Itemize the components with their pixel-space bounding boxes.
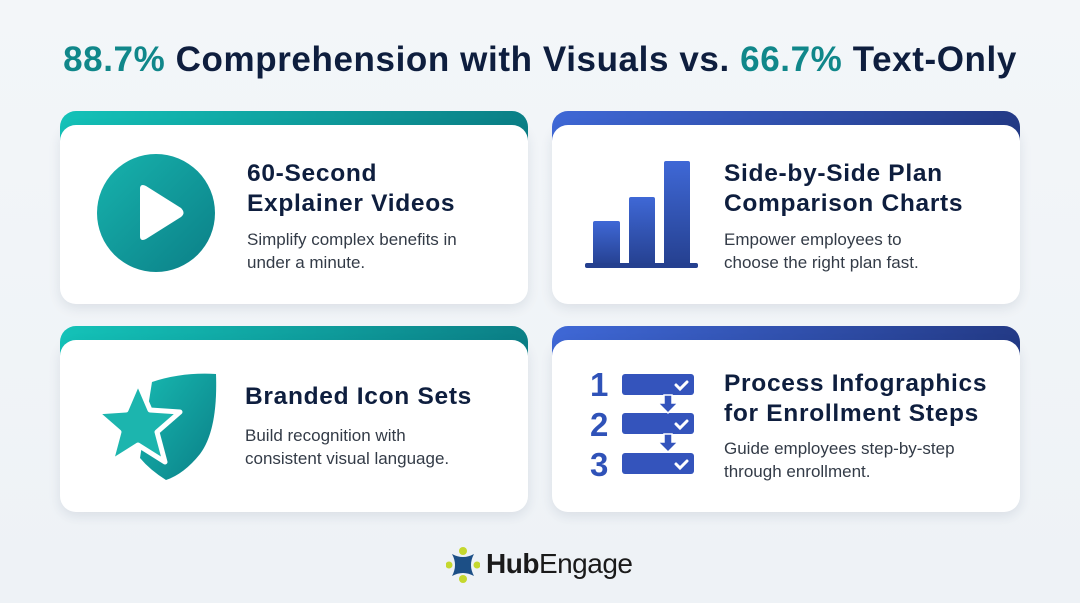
- panel: comparison charts: [550, 111, 1022, 310]
- heading: [724, 370, 987, 427]
- text: Simplify complex benefits in: [247, 230, 457, 249]
- text: Build recognition with: [245, 426, 406, 445]
- heading: Side-by-Side Plan: [724, 160, 943, 187]
- icon: numbered steps: 2: [590, 406, 608, 443]
- text: Empower employees to: [724, 230, 902, 249]
- icon: bar chart: [585, 161, 698, 268]
- icon: numbered steps: [590, 370, 694, 483]
- text: choose the right plan fast.: [724, 253, 919, 272]
- logo: HubEngage: [446, 547, 632, 583]
- text: Guide employees step-by-step: [724, 439, 955, 458]
- heading: [724, 160, 963, 217]
- text: consistent visual language.: [245, 449, 449, 468]
- heading: 60-Second: [247, 160, 377, 187]
- text: [245, 426, 449, 468]
- panel: process infographics: [550, 326, 1022, 518]
- panel: icon sets: [58, 326, 530, 518]
- icon: logo mark: [446, 547, 480, 583]
- panel: explainer videos: [58, 111, 530, 310]
- text: under a minute.: [247, 253, 365, 272]
- text: [724, 230, 919, 272]
- heading: [247, 160, 455, 217]
- icon: numbered steps: 3: [590, 446, 608, 483]
- heading: Comparison Charts: [724, 190, 963, 217]
- text: [724, 439, 955, 481]
- heading: Branded Icon Sets: [245, 383, 472, 410]
- heading: Explainer Videos: [247, 190, 455, 217]
- icon: play button: [97, 154, 215, 272]
- heading: Process Infographics: [724, 370, 987, 397]
- icon: star shield: [102, 374, 216, 480]
- heading: for Enrollment Steps: [724, 400, 979, 427]
- title: 88.7% Comprehension with Visuals vs. 66.7% Text-Only: [63, 40, 1017, 79]
- logo text: HubEngage: [486, 548, 632, 579]
- text: through enrollment.: [724, 462, 870, 481]
- text: [247, 230, 457, 272]
